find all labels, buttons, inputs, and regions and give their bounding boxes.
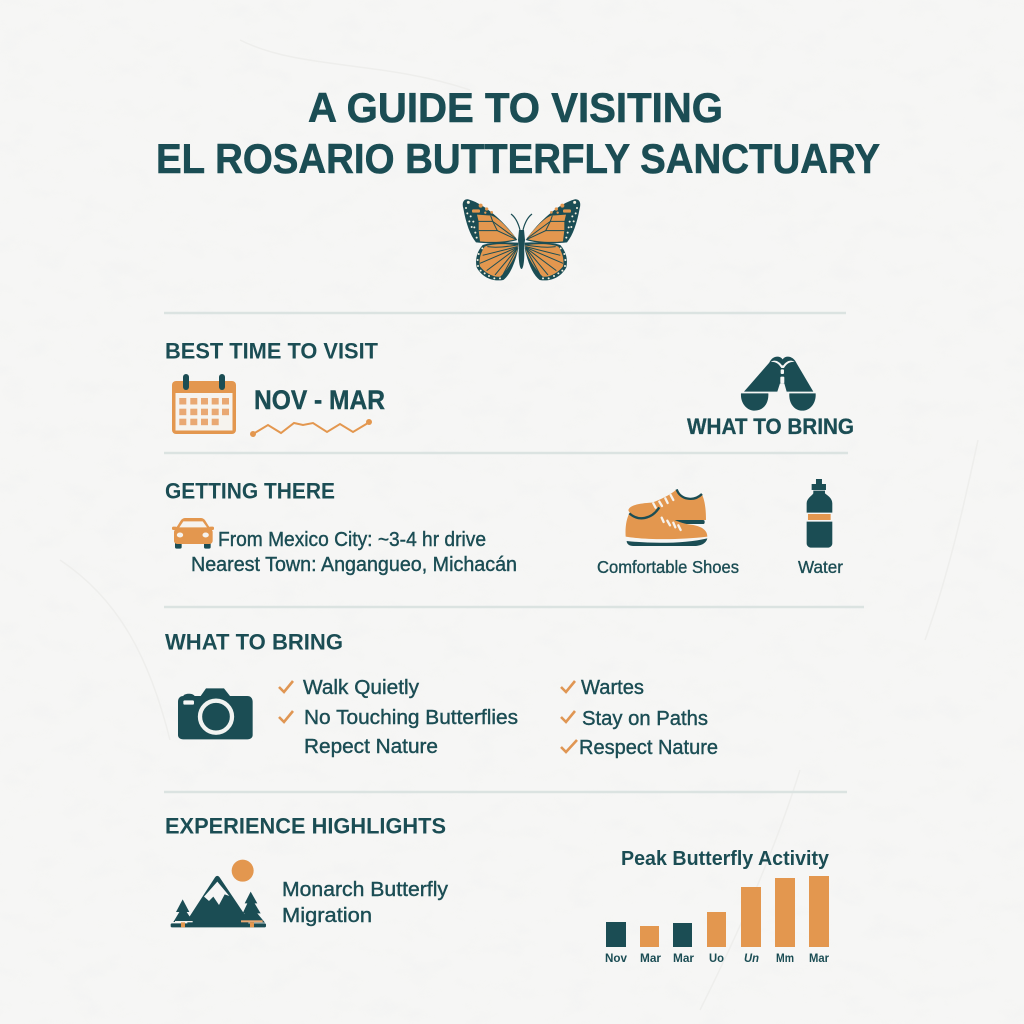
icon: shoes [626,489,707,546]
icon: car [172,518,214,549]
axis labels: Uo [709,951,724,965]
title [156,84,880,182]
chart: peak butterfly activity [605,847,830,965]
icon: camera [178,688,253,739]
text: nearest town: Nearest Town: Angangueo, Michacán [191,553,517,576]
heading: getting there: GETTING THERE [165,478,335,504]
text: drive: From Mexico City: ~3-4 hr drive [218,528,486,551]
panel: best time to visit [165,338,385,437]
icon: water bottle [807,479,832,548]
heading: what to bring: WHAT TO BRING [165,630,343,654]
heading: best time to visit: BEST TIME TO VISIT [165,338,379,364]
panel: getting there [165,478,517,576]
icon: calendar [172,374,236,434]
bars [606,876,829,947]
axis labels: Mm [776,951,794,965]
axis labels: Mar [640,951,661,965]
heading: experience highlights: EXPERIENCE HIGHLIGHTS [165,814,446,838]
checklist left [279,676,518,758]
checklist right: Respect Nature [579,736,718,759]
chart title: Peak Butterfly Activity [621,847,830,870]
title: A GUIDE TO VISITING [308,84,723,131]
panel: what to bring [165,630,718,759]
heading: what to bring right: WHAT TO BRING [687,414,854,439]
axis labels: Mar [673,951,694,965]
axis labels: Mar [809,951,829,965]
icon: binoculars [741,357,816,411]
checklist right [561,676,718,759]
checklist left: Repect Nature [304,735,438,758]
sparkline [250,419,372,437]
label: water: Water [798,557,843,577]
panel: experience highlights [165,814,449,927]
checklist left: Walk Quietly [303,676,420,699]
icon: mountain and sun [171,860,266,927]
axis labels: Nov [605,951,627,965]
title: EL ROSARIO BUTTERFLY SANCTUARY [156,135,880,182]
text: monarch migration: Migration [282,904,372,927]
label: comfortable shoes: Comfortable Shoes [597,557,739,577]
checklist right: Stay on Paths [582,707,708,730]
icon: monarch butterfly [463,199,580,280]
text: date range: NOV - MAR [254,385,385,415]
axis labels [605,951,829,965]
text: monarch migration [282,878,449,927]
checklist right: Wartes [581,676,644,699]
axis labels: Un [744,951,759,965]
text: monarch migration: Monarch Butterfly [282,878,449,901]
checklist left: No Touching Butterflies [304,706,518,729]
